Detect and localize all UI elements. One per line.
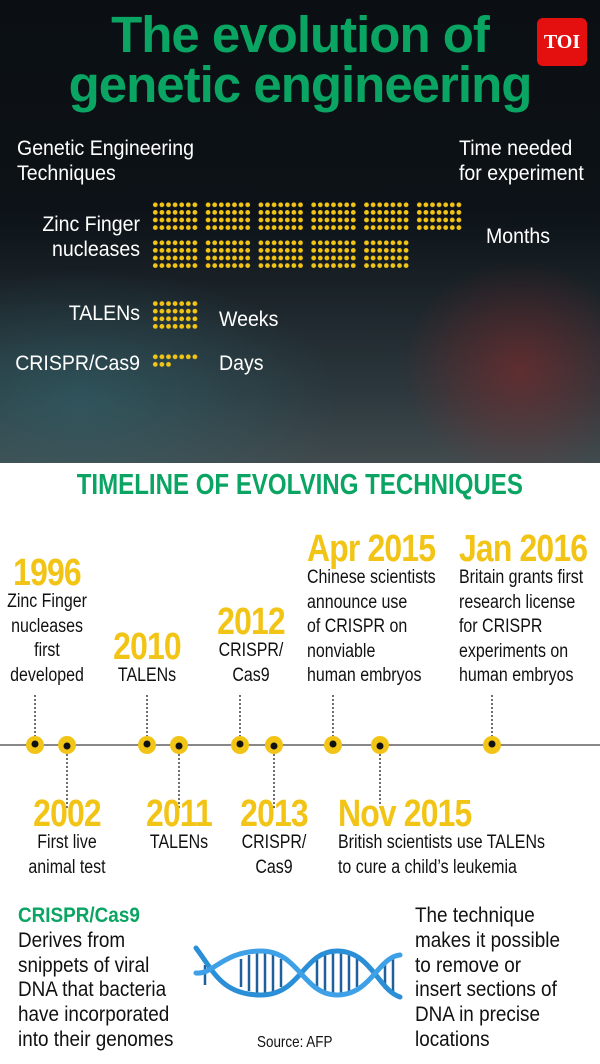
text block: CRISPR definition [18,904,174,1051]
event Apr 2015: of CRISPR on [307,616,407,637]
event 2002: animal test [28,856,106,878]
text block: technique: DNA in precise [415,1003,540,1026]
column header: time: Time needed [459,137,572,160]
event 2002: 2002 [33,793,101,835]
event 1996: developed [10,664,84,686]
section heading: TIMELINE OF EVOLVING TECHNIQUES [77,469,523,501]
event Apr 2015 [307,528,436,686]
event Nov 2015: British scientists use TALENs [338,832,545,853]
label: Zinc Finger [42,213,140,261]
logo: TOI [537,18,587,66]
event 2011: 2011 [146,793,212,835]
icon: DNA helix [194,946,402,1000]
event Jan 2016: experiments on [459,640,568,662]
event Jan 2016: for CRISPR [459,616,542,637]
text block: CRISPR definition: have incorporated [18,1003,169,1026]
label: Months: Months [486,225,550,248]
text block: technique [415,904,560,1051]
title [69,6,531,113]
event Apr 2015: Apr 2015 [307,528,435,570]
event Apr 2015: nonviable [307,640,375,662]
event Jan 2016: Britain grants first [459,567,583,588]
text block: CRISPR definition: into their genomes [18,1028,174,1051]
event Jan 2016: research license [459,592,575,612]
event Jan 2016: human embryos [459,665,573,686]
text block: CRISPR definition: DNA that bacteria [18,978,166,1001]
event Nov 2015: to cure a child’s leukemia [338,856,517,878]
column header: techniques: Genetic Engineering [17,137,194,160]
text block: CRISPR definition: Derives from [18,929,125,952]
column header: techniques [17,137,194,185]
text block: technique: locations [415,1028,490,1051]
text block: technique: makes it possible [415,929,560,952]
text block: CRISPR definition: snippets of viral [18,954,149,977]
dark header background [0,0,600,463]
label: Zinc Finger: nucleases [52,238,140,261]
label: Zinc Finger: Zinc Finger [42,213,140,236]
event 2002: First live [37,832,97,853]
text block: technique: The technique [415,904,535,927]
text block: technique: to remove or [415,954,521,977]
event 2010: 2010 [113,626,181,668]
label: CRISPR: CRISPR/Cas9 [15,352,140,375]
dot chart [152,202,462,367]
column header: time [459,137,584,185]
event 2012 [217,601,285,686]
label: Weeks: Weeks [219,308,278,331]
text block: technique: insert sections of [415,978,557,1001]
event 2013: Cas9 [255,856,293,878]
title: The evolution of [111,6,489,63]
event 1996: nucleases [11,616,83,636]
event 1996 [7,552,87,686]
event 1996: first [34,640,60,661]
event 2002 [28,793,106,878]
event 2012: CRISPR/ [219,640,283,661]
event Apr 2015: announce use [307,592,407,612]
text block: CRISPR definition: CRISPR/Cas9 [18,904,140,927]
event 2010: TALENs [118,665,176,686]
label: TALENs: TALENs [69,302,140,325]
event Jan 2016: Jan 2016 [459,528,587,570]
column header: time: for experiment [459,162,584,185]
title: genetic engineering [69,56,531,113]
event 1996: 1996 [13,552,81,594]
event 2012: 2012 [217,601,285,643]
event Jan 2016 [459,528,587,686]
event 1996: Zinc Finger [7,591,87,612]
event Nov 2015: Nov 2015 [338,793,471,835]
source: Source: AFP [257,1034,332,1051]
column header: techniques: Techniques [17,162,116,185]
event Apr 2015: human embryos [307,665,421,686]
event 2013: 2013 [240,793,308,835]
label: Days: Days [219,352,264,375]
event 2013 [240,793,308,878]
logo: TOI: TOI [544,31,580,53]
event 2011 [146,793,212,853]
event Apr 2015: Chinese scientists [307,567,436,588]
event 2011: TALENs [150,832,208,853]
event 2012: Cas9 [232,664,270,686]
timeline line and markers [0,695,600,808]
event 2013: CRISPR/ [242,832,306,853]
event Nov 2015 [338,793,545,878]
